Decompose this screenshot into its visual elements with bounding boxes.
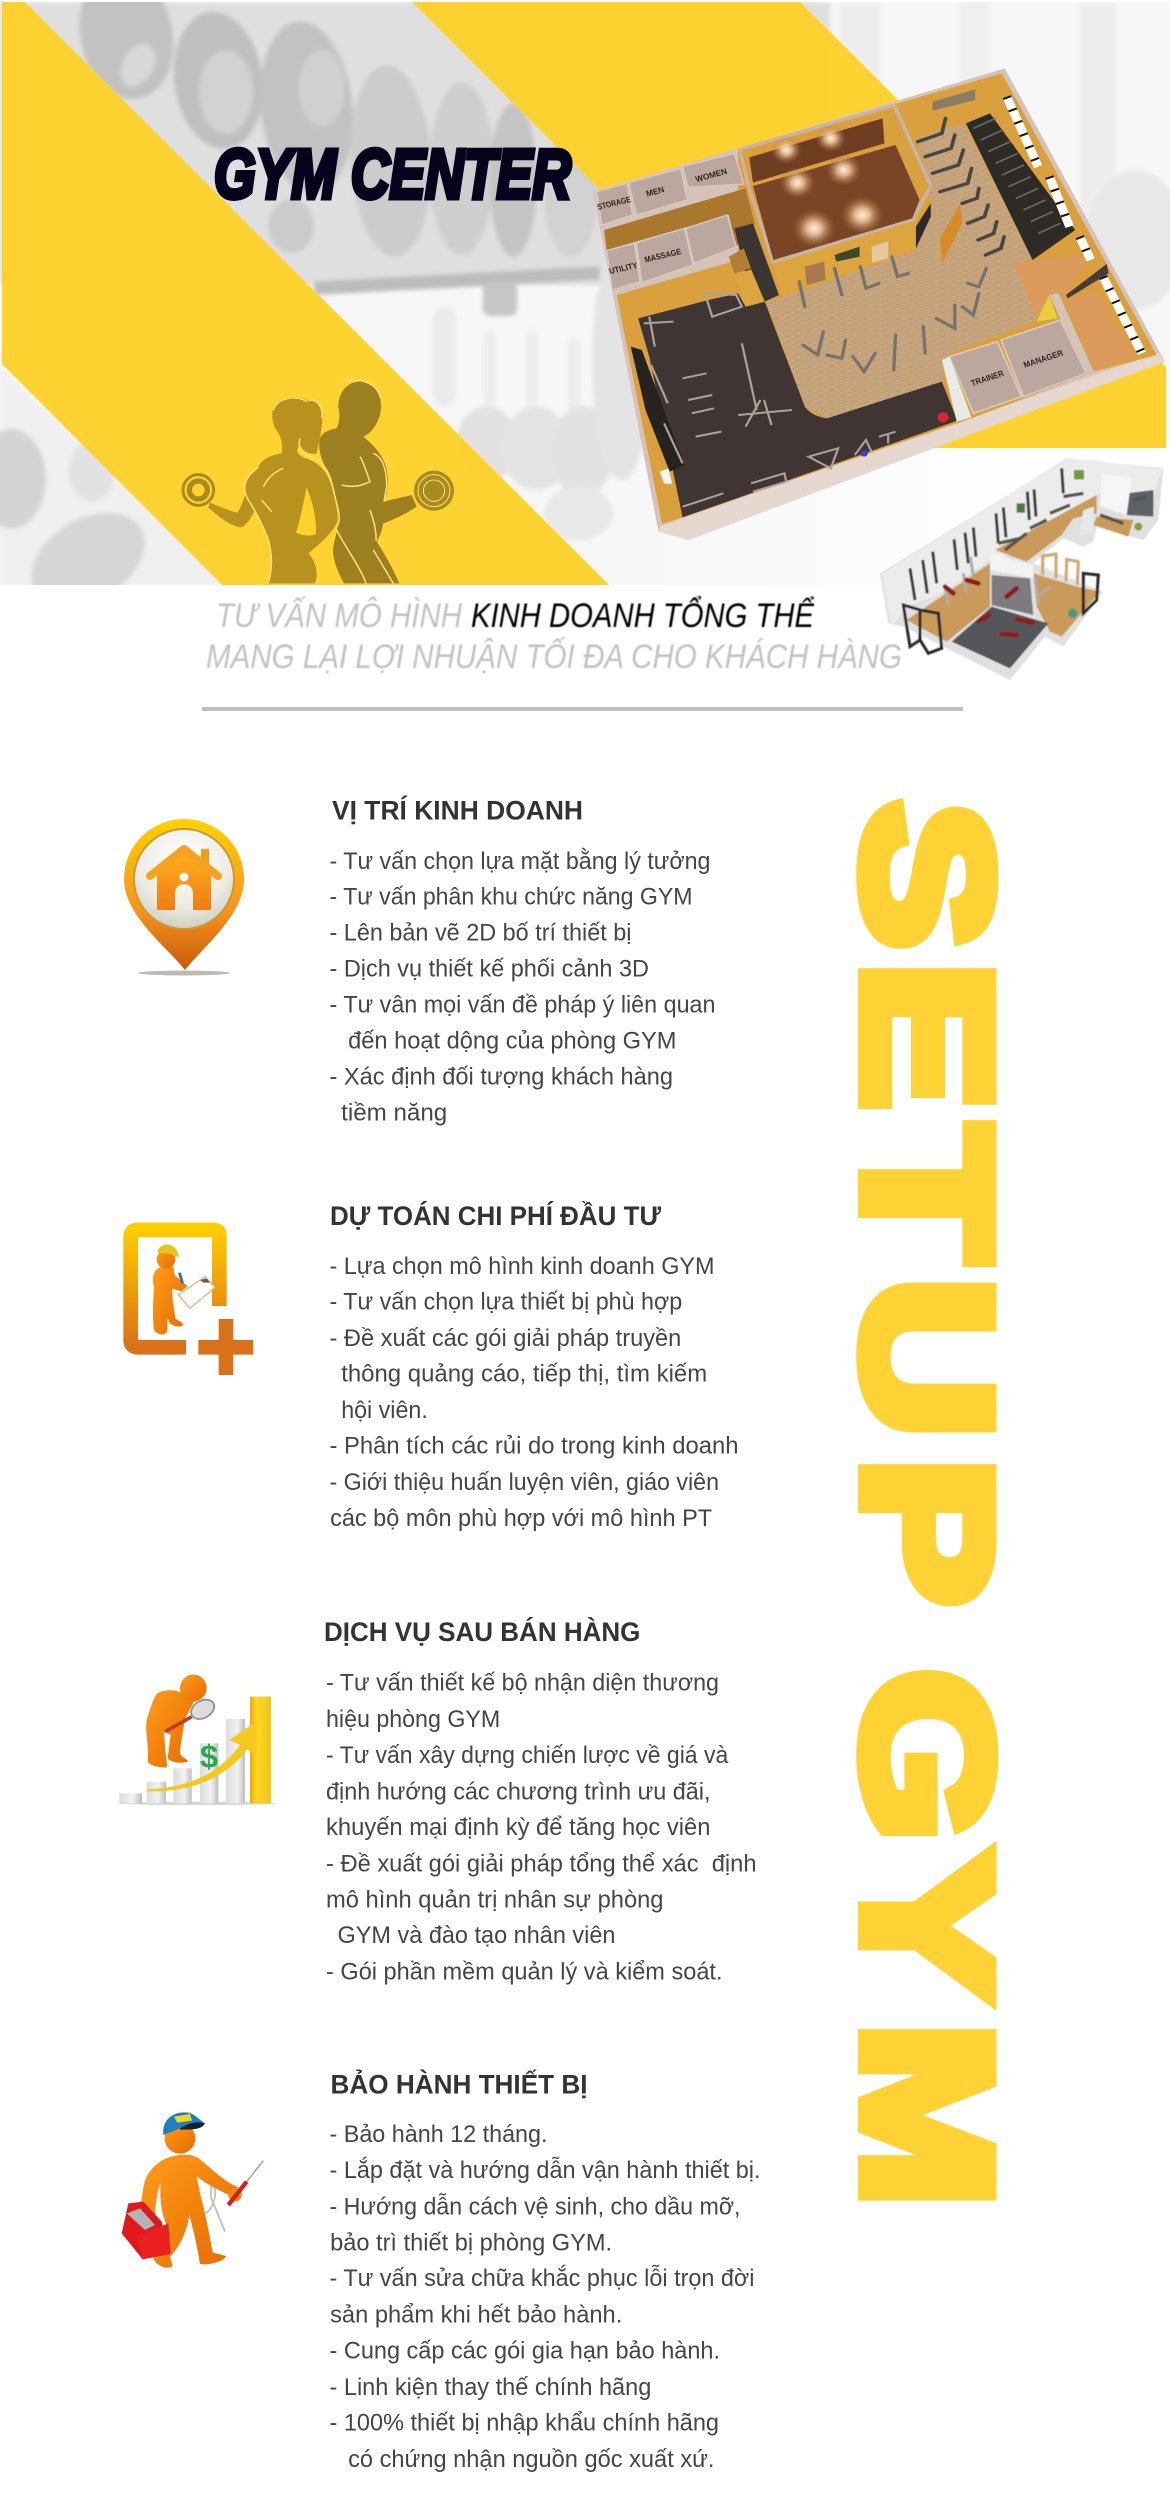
background photo: gray dumbbell rack	[0, 0, 1170, 625]
white partitions	[990, 553, 1033, 578]
lower rooms	[607, 215, 736, 290]
screwdriver	[228, 2182, 247, 2205]
text block: after-sales service: - Tư vấn thiết kế bộ nhận diện thương	[326, 1670, 719, 1697]
technician body	[141, 2155, 238, 2268]
woman figure	[245, 397, 337, 583]
cable coil	[185, 2155, 225, 2232]
back walls	[882, 460, 1162, 627]
entrance floor	[1014, 255, 1088, 320]
blue ball	[860, 450, 868, 457]
mirror	[992, 575, 1033, 615]
rising arrow	[147, 1721, 257, 1791]
treadmill stripes	[973, 118, 1060, 233]
gym equipment: strength machines	[799, 257, 986, 372]
woman raised arm	[208, 493, 255, 527]
text block: location: đến hoạt dộng của phòng GYM	[348, 1028, 676, 1054]
studio front details	[805, 203, 931, 285]
text block: equipment warranty: - Linh kiện thay thế chính hãng	[330, 2374, 651, 2401]
studio walls	[738, 103, 933, 297]
text block: investment estimate: - Giới thiệu huấn luyện viên, giáo viên	[330, 1469, 719, 1496]
windows on right wall	[1007, 97, 1142, 353]
text block: after-sales service: - Gói phần mềm quản lý và kiểm soát.	[326, 1958, 722, 1986]
yellow bar	[250, 1697, 271, 1803]
red benches	[945, 580, 1033, 635]
text block: investment estimate: - Phân tích các rủi do trong kinh doanh	[330, 1432, 738, 1460]
text block: investment estimate: - Lựa chọn mô hình kinh doanh GYM	[330, 1253, 714, 1280]
subtitle line 1: black part: KINH DOANH TỔNG THỂ	[471, 597, 814, 635]
left wall panel	[631, 347, 684, 472]
text block: location: - Tư vấn chọn lựa mặt bằng lý tưởng	[330, 848, 710, 875]
subtitle	[206, 597, 902, 676]
room labels: MANAGER	[1022, 348, 1065, 370]
inspecting figure	[146, 1690, 195, 1767]
subtitle divider	[202, 707, 963, 711]
studio lights	[771, 124, 884, 248]
text block: equipment warranty: - Cung cấp các gói gia hạn bảo hành.	[330, 2338, 720, 2365]
text block: location: - Xác định đối tượng khách hàng	[330, 1064, 673, 1090]
gym equipment: cardio row	[918, 118, 1004, 255]
text block: after-sales service: định hướng các chương trình ưu đãi,	[326, 1778, 710, 1805]
small orange block	[729, 248, 751, 273]
text block: equipment warranty: - Tư vấn sửa chữa khắc phục lỗi trọn đời	[330, 2265, 754, 2292]
highlights	[245, 380, 393, 583]
icon: location pin with house	[124, 819, 244, 976]
room labels: STORAGE	[596, 195, 632, 212]
wood floors	[907, 563, 990, 642]
chart bars	[119, 1719, 245, 1803]
heading: DỰ TOÁN CHI PHÍ ĐẦU TƯ: DỰ TOÁN CHI PHÍ ĐẦU TƯ	[330, 1200, 662, 1231]
toolbox	[122, 2202, 170, 2259]
heading: BẢO HÀNH THIẾT BỊ: BẢO HÀNH THIẾT BỊ	[330, 2067, 588, 2099]
text block: investment estimate: các bộ môn phù hợp với mô hình PT	[330, 1505, 712, 1532]
upper rooms	[597, 153, 744, 225]
hand	[228, 2188, 242, 2202]
text block: investment estimate	[330, 1253, 738, 1532]
red exercise ball	[937, 412, 949, 422]
trainer and manager rooms	[949, 320, 1086, 413]
text block: location: - Dịch vụ thiết kế phối cảnh 3D	[330, 956, 649, 982]
text block: location: - Tư vấn phân khu chức năng GYM	[330, 884, 692, 910]
connecting wall	[1049, 293, 1094, 373]
room labels: TRAINER	[970, 368, 1006, 388]
text block: investment estimate: - Đề xuất các gói giải pháp truyền	[330, 1325, 681, 1352]
text block: equipment warranty: - 100% thiết bị nhập khẩu chính hãng	[330, 2410, 719, 2437]
gray floors	[952, 607, 1048, 668]
text block: after-sales service: GYM và đào tạo nhân viên	[338, 1922, 616, 1949]
text block: after-sales service: - Tư vấn xây dựng chiến lược về giá và	[326, 1742, 729, 1769]
corridor behind rooms	[604, 188, 755, 250]
title: GYM CENTER	[214, 135, 571, 213]
small 3D gym layout illustration	[880, 458, 1163, 680]
studio wood floors	[749, 118, 884, 183]
worker body	[153, 1267, 187, 1334]
subtitle line 1: gray part: TƯ VẤN MÔ HÌNH	[216, 597, 462, 635]
dark training floor	[638, 293, 957, 517]
text block: after-sales service: hiệu phòng GYM	[326, 1706, 500, 1733]
room labels: WOMEN	[694, 166, 728, 184]
text block: location: - Lên bản vẽ 2D bố trí thiết bị	[330, 920, 632, 946]
heading: VỊ TRÍ KINH DOANH: VỊ TRÍ KINH DOANH	[332, 794, 583, 826]
man figure	[319, 381, 417, 583]
poster	[940, 203, 962, 264]
white panel	[660, 468, 672, 484]
door frames	[903, 573, 1098, 653]
gym floor plan illustration	[593, 68, 1165, 540]
wood door frames	[1043, 554, 1078, 585]
text block: after-sales service: mô hình quản trị nhân sự phòng	[326, 1886, 664, 1914]
outer walls	[593, 68, 1165, 540]
heading: DỊCH VỤ SAU BÁN HÀNG: DỊCH VỤ SAU BÁN HÀNG	[324, 1616, 640, 1647]
blue cap	[163, 2112, 205, 2135]
text block: equipment warranty: - Bảo hành 12 tháng.	[330, 2121, 548, 2148]
icon: engineer with clipboard in frame	[131, 1230, 253, 1375]
vertical headline: SETUP GYM: SETUP GYM	[826, 802, 1029, 2207]
text block: equipment warranty: bảo trì thiết bị phòng GYM.	[330, 2230, 612, 2257]
text block: equipment warranty: sản phẩm khi hết bảo hành.	[330, 2302, 622, 2328]
equipment: gray machines	[945, 557, 1050, 607]
room labels: UTILITY	[608, 260, 639, 276]
silhouette: woman and man with dumbbells	[183, 380, 454, 583]
dollar sign: $	[200, 1737, 218, 1774]
room labels: MEN	[645, 185, 666, 198]
left dumbbell	[183, 475, 214, 505]
subtitle line 2: MANG LẠI LỢI NHUẬN TỐI ĐA CHO KHÁCH HÀNG	[206, 637, 902, 676]
white room wall	[942, 357, 971, 422]
wall art	[1074, 470, 1084, 479]
base slab	[880, 458, 1163, 680]
right dumbbell	[414, 471, 454, 511]
text block: after-sales service	[326, 1670, 756, 1986]
magnifying glass	[188, 1696, 218, 1723]
text block: location: - Tư vân mọi vấn đề pháp ý liên quan	[330, 992, 716, 1018]
text block: after-sales service: khuyến mại định kỳ để tăng học viên	[326, 1814, 710, 1841]
gym equipment: free weights	[644, 293, 896, 507]
text block: investment estimate: - Tư vấn chọn lựa thiết bị phù hợp	[330, 1288, 682, 1316]
plants	[1068, 609, 1077, 618]
carpet floor	[766, 123, 1038, 418]
text block: after-sales service: - Đề xuất gói giải pháp tổng thể xác định	[326, 1850, 756, 1877]
room labels: MASSAGE	[643, 247, 683, 264]
text block: location	[330, 848, 716, 1126]
text block: equipment warranty: - Hướng dẫn cách vệ sinh, cho dầu mỡ,	[330, 2193, 740, 2220]
room labels	[596, 166, 1065, 388]
text block: equipment warranty: - Lắp đặt và hướng dẫn vận hành thiết bị.	[330, 2157, 760, 2184]
hard hat	[157, 1244, 179, 1257]
front wall face	[659, 353, 1165, 540]
interior base	[617, 73, 1157, 524]
text block: location: tiềm năng	[341, 1100, 447, 1126]
gap between woman's arm and waist	[296, 487, 316, 536]
equipment: dark machines	[998, 493, 1147, 550]
yellow diagonal band: right	[412, 2, 1166, 448]
treadmill strip	[966, 113, 1075, 260]
text block: equipment warranty	[330, 2121, 760, 2473]
icon: technician with toolbox	[122, 2112, 263, 2268]
sign on back wall	[933, 89, 975, 111]
window frames on wall	[910, 468, 1063, 600]
text block: investment estimate: thông quảng cáo, tiếp thị, tìm kiếm	[341, 1360, 707, 1388]
clipboard	[178, 1277, 215, 1308]
text block: investment estimate: hội viên.	[341, 1397, 428, 1424]
text block: equipment warranty: có chứng nhận nguồn gốc xuất xứ.	[348, 2446, 714, 2473]
yellow diagonal band: left	[2, 2, 609, 585]
icon: figure inspecting growth chart	[117, 1675, 277, 1805]
